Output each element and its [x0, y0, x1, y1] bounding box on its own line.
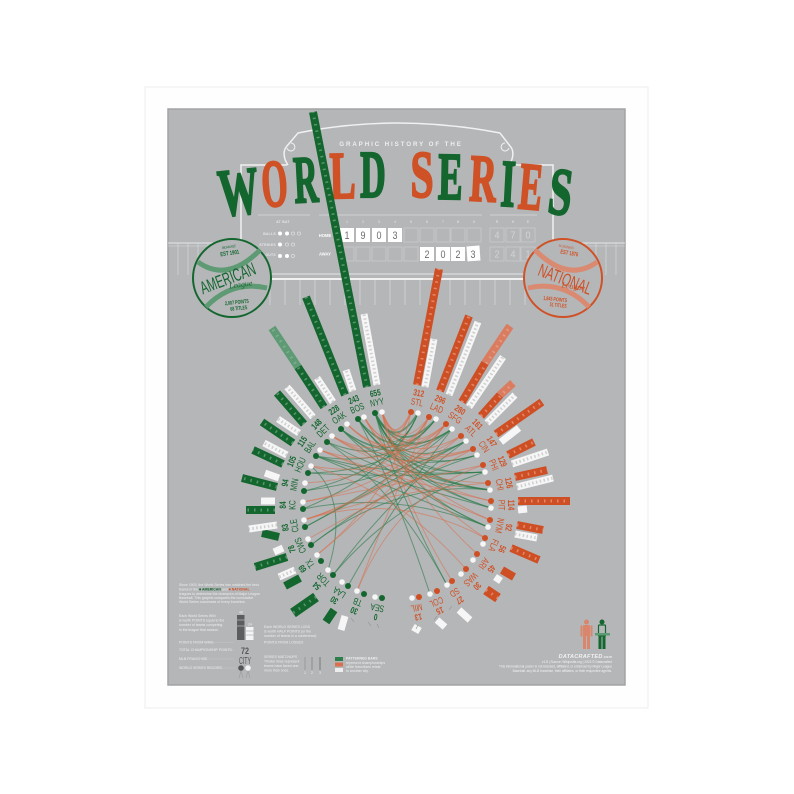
scoreboard: R — [496, 220, 499, 224]
title: World Series: W — [215, 153, 263, 231]
scoreboard: 7 — [510, 230, 516, 242]
badge: American League: League — [227, 278, 253, 291]
scoreboard: 3 — [470, 249, 476, 261]
team labels: American League: MIN — [288, 478, 301, 492]
key: patterned bars: while franchises relate — [346, 665, 381, 669]
intro text: Since 1903, the World Series has matched the best — [179, 583, 259, 587]
key: example bars: 24 — [248, 622, 252, 626]
scoreboard: AWAY — [319, 252, 331, 256]
key: example team: 72 — [241, 646, 249, 657]
scoreboard: 1 — [344, 230, 350, 242]
scoreboard — [258, 215, 537, 261]
footer credits: v1.8 | Source: Wikipedia.org | 2023 © Datacrafted — [542, 660, 612, 664]
scoreboard: HOME — [319, 233, 331, 238]
bars: American League franchises — [272, 328, 298, 367]
team labels: American League — [278, 387, 385, 623]
scoreboard: 0 — [440, 249, 446, 261]
scoreboard: E — [527, 220, 530, 224]
key: series matchups: 1 — [304, 671, 306, 675]
key: example bars: 48 — [239, 610, 243, 614]
team labels: American League: 243 — [347, 393, 361, 406]
key: example team: CITY — [239, 656, 251, 667]
intro text: leagues to determine the champion of Major League — [179, 592, 260, 596]
team labels: National League: PHI — [486, 458, 500, 472]
team labels: American League: 94 — [280, 478, 291, 487]
footer credits: DATACRAFTED.com — [559, 654, 612, 660]
key: patterned bars: represent championships — [346, 661, 385, 665]
poster background — [168, 109, 625, 685]
scoreboard: 5 — [410, 220, 412, 224]
key: example team — [238, 646, 251, 678]
scoreboard: 4 — [394, 220, 396, 224]
scoreboard: 2 — [456, 249, 460, 261]
scoreboard: 4 — [494, 230, 500, 242]
title: World Series: O — [259, 147, 290, 222]
scoreboard: BALLS — [263, 232, 276, 236]
team labels: National League: 129 — [495, 454, 509, 469]
scoreboard: AT BAT — [276, 220, 290, 224]
team labels: National League: 280 — [453, 403, 468, 418]
team labels: National League: SD — [448, 585, 461, 599]
scoreboard: 2 — [494, 250, 500, 260]
team labels: American League: 228 — [327, 403, 342, 417]
title: World Series: S — [410, 138, 434, 213]
key: points from wins: is worth POINTS equal to the — [179, 618, 224, 622]
key: row labels — [179, 640, 236, 670]
bar year markings — [242, 112, 367, 613]
scoreboard: OUTS — [265, 253, 276, 257]
team labels: National League: PIT — [496, 500, 507, 510]
key: points from losses: number of teams in a conference). — [264, 634, 317, 638]
team labels: American League: 54 — [310, 579, 323, 592]
team labels: National League: 126 — [503, 477, 515, 490]
key: points from wins: Each World Series WIN — [179, 614, 216, 618]
bars: National League franchises — [485, 326, 513, 395]
team labels: American League: 30 — [348, 604, 359, 617]
team labels: American League: HOU — [293, 456, 308, 474]
title: World Series: E — [516, 148, 546, 225]
key: series matchups: 3 — [319, 671, 321, 675]
team labels: American League: 105 — [285, 454, 299, 468]
footer credits — [499, 654, 612, 673]
team labels: American League: NYY — [369, 396, 385, 409]
team labels: American League: TX — [304, 557, 317, 570]
badge: American League: AMERICAN — [197, 259, 259, 298]
scoreboard: 1 — [526, 250, 531, 260]
title: World Series: E — [437, 139, 463, 214]
scoreboard: 2 — [362, 220, 364, 224]
key: patterned bars: PATTERNED BARS — [346, 656, 378, 660]
team labels: American League: 78 — [286, 543, 298, 554]
team labels: National League: STL — [410, 396, 424, 409]
scoreboard: H — [512, 220, 515, 224]
team labels: National League: 45 — [485, 563, 498, 575]
team labels: National League: FLA — [486, 538, 500, 553]
team labels: American League: 69 — [296, 562, 309, 575]
key: points from losses — [264, 625, 317, 644]
title: World Series: L — [329, 138, 356, 213]
title: World Series: S — [545, 154, 577, 231]
scoreboard: 3 — [392, 230, 398, 242]
team labels: National League: COL — [428, 594, 445, 609]
team labels: National League: CHI — [493, 478, 506, 492]
scoreboard: 1 — [346, 220, 348, 224]
intro text: World Series successes of every franchise. — [179, 600, 246, 604]
icon: green player — [595, 620, 610, 649]
team labels: American League: 148 — [309, 416, 324, 432]
team labels: National League: WAS — [461, 570, 479, 589]
team labels: American League: 83 — [279, 522, 291, 532]
team labels: National League: ARI — [476, 556, 491, 571]
key: row labels: POINTS FROM WINS — [179, 640, 214, 644]
team labels: National League: 13 — [413, 611, 423, 623]
scoreboard: 2 — [424, 249, 430, 261]
subtitle: GRAPHIC HISTORY OF THE — [339, 141, 463, 148]
key: row labels: MLB FRANCHISE — [179, 657, 208, 661]
scoreboard: 7 — [442, 220, 444, 224]
key: patterned bars — [335, 656, 385, 673]
frame — [145, 87, 648, 708]
icon: red player — [580, 620, 592, 649]
team labels: National League: 161 — [470, 417, 485, 432]
key: row labels: WORLD SERIES RECORD — [179, 666, 222, 670]
scoreboard: 8 — [457, 220, 459, 224]
team labels: National League: SFG — [446, 410, 463, 426]
key: points from losses: POINTS FROM LOSSES — [264, 640, 304, 644]
team labels: American League: LAA — [331, 584, 348, 600]
scoreboard: 4 — [510, 250, 516, 260]
scoreboard: 9 — [360, 230, 366, 242]
key: series matchups: 2 — [311, 671, 313, 675]
team labels: National League: 15 — [434, 604, 445, 617]
intro text — [179, 583, 260, 604]
footer credits: Baseball, any MLB franchise, their affiliates, or their respective agents. — [513, 669, 612, 673]
team labels: American League: 0 — [372, 611, 378, 622]
key: series matchups: more than once. — [264, 668, 289, 672]
badge: National League: 1,845 POINTS — [543, 296, 568, 304]
key: points from wins: in the league that season. — [179, 628, 219, 632]
team labels: National League: 56 — [496, 544, 508, 555]
stadium scoreboard outline — [168, 123, 625, 305]
team labels: National League: ATL — [463, 423, 479, 439]
key: row labels: TOTAL CHAMPIONSHIP POINTS — [179, 648, 232, 652]
team labels: National League — [410, 387, 516, 623]
team labels: National League: 27 — [453, 594, 466, 607]
badge: American League: MILWAUKEE — [222, 244, 237, 250]
team labels: American League: 655 — [369, 387, 382, 399]
team labels: National League: 312 — [412, 387, 426, 399]
title: World Series: R — [292, 143, 320, 218]
team labels: National League: 114 — [506, 500, 516, 511]
team labels: National League: 147 — [484, 434, 499, 449]
chord links: National League wins — [303, 412, 491, 591]
scoreboard: 0 — [526, 230, 531, 242]
key: points from wins — [179, 614, 224, 632]
scoreboard: STRIKES — [259, 243, 276, 247]
team labels: American League: CLE — [288, 518, 301, 533]
badge: National League — [524, 239, 602, 317]
title: World Series — [215, 137, 577, 231]
team labels: American League: KC — [287, 500, 298, 510]
team labels: American League: DET — [315, 423, 332, 440]
team labels: National League: 30 — [471, 580, 483, 593]
key: points from losses: Each WORLD SERIES LOSS — [264, 625, 311, 629]
key: points from wins: number of teams competing — [179, 623, 222, 627]
team labels: American League: 30 — [328, 593, 340, 606]
team labels: National League: CIN — [476, 439, 491, 455]
team labels: National League: LAD — [428, 401, 445, 416]
key: patterned bars: to another city. — [346, 669, 369, 673]
badge: National League: IN CINCINNATI — [558, 244, 574, 250]
scoreboard: 9 — [473, 220, 475, 224]
key: example bars — [237, 610, 254, 640]
team labels: American League: 115 — [295, 434, 310, 449]
team labels: National League: 296 — [433, 393, 448, 407]
team labels: National League: MIL — [410, 601, 423, 614]
key: series matchups: teams have faced one — [264, 664, 298, 668]
team labels: American League: OAK — [330, 410, 348, 426]
badge: National League: League — [560, 280, 586, 293]
intro text: Baseball. This graphic compares the cumulative — [179, 596, 253, 600]
team labels: American League: BAL — [302, 438, 318, 455]
title: World Series: R — [468, 141, 499, 217]
key: series matchups — [264, 655, 321, 675]
team labels: American League: CWS — [293, 536, 309, 555]
intro text: teams in the ■ AMERICAN and ■ NATIONAL — [179, 588, 250, 592]
team nodes: winners — [300, 410, 385, 601]
title: World Series: D — [360, 137, 386, 212]
badge: American League: EST 1901 — [220, 250, 240, 258]
key: points from losses: is worth HALF POINTS (or the — [264, 630, 311, 634]
badge: American League — [193, 239, 271, 317]
key: series matchups: Thicker lines represent — [264, 660, 299, 664]
badge: National League: EST 1876 — [560, 249, 579, 259]
team labels: National League: NYM — [493, 517, 506, 534]
chord links: American League wins — [303, 413, 491, 594]
team labels: American League: TB — [351, 595, 364, 608]
badge: American League: 68 TITLES — [230, 305, 248, 313]
badge: American League: 2,007 POINTS — [225, 299, 249, 307]
team labels: National League: 92 — [503, 523, 514, 533]
scoreboard: 6 — [426, 220, 428, 224]
team nodes: runner-up — [300, 409, 494, 601]
scoreboard: 0 — [376, 230, 382, 242]
key: series matchups: SERIES MATCHUPS — [264, 655, 298, 659]
scoreboard: 3 — [378, 220, 380, 224]
team labels: American League: BOS — [349, 401, 366, 416]
bars: runner-up finishes — [249, 314, 553, 631]
team labels: American League: SEA — [369, 601, 385, 614]
team labels: American League: 84 — [278, 501, 288, 509]
team labels: American League: TOR — [315, 570, 332, 588]
zero-value ticks — [351, 606, 452, 629]
footer credits: This informational poster is not licensed, affiliated, or endorsed by Major League — [499, 664, 612, 668]
title: World Series: I — [499, 146, 517, 221]
badge: National League: NATIONAL — [535, 260, 595, 299]
badge: National League: 51 TITLES — [549, 302, 567, 310]
